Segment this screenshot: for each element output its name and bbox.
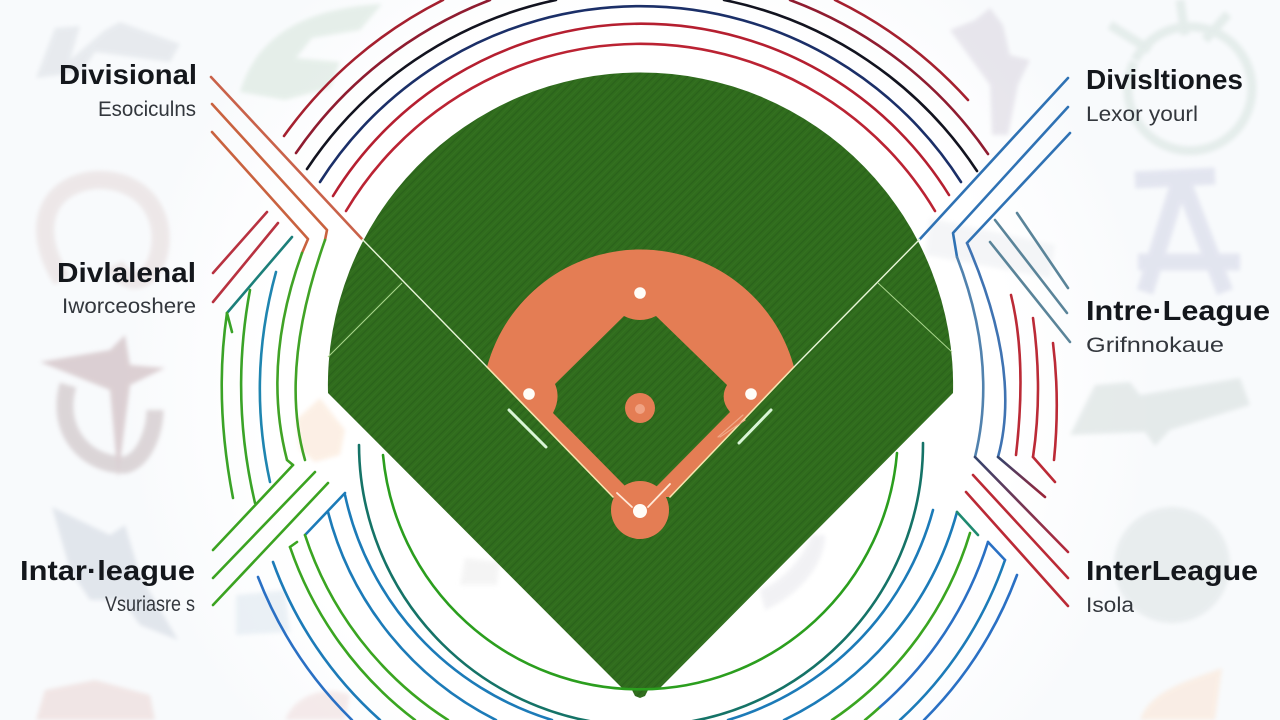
label: top right: Lexor yourl <box>1086 103 1198 126</box>
inner green arc crossing the field tip <box>383 453 897 689</box>
connector lines: lower left <box>213 465 328 605</box>
label: top right <box>1086 64 1243 126</box>
inner grass diamond <box>553 316 730 487</box>
label: top left: Esociculns <box>98 98 196 121</box>
label: middle right: Grifnnokaue <box>1086 334 1224 357</box>
arcs: lower green and blue band <box>258 443 1017 720</box>
outfield foul and fence lines <box>328 239 952 367</box>
infield dirt <box>487 249 794 497</box>
connector lines: upper right <box>920 78 1070 342</box>
label: middle left <box>57 257 196 318</box>
label: bottom right <box>1086 555 1258 617</box>
label: bottom right: Isola <box>1086 594 1134 617</box>
label: top left: Divisional <box>59 59 197 90</box>
connector lines: lower right <box>966 457 1068 606</box>
label: bottom left: Intar·league <box>20 555 195 586</box>
label: bottom left <box>20 555 195 616</box>
arcs: upper red and navy band <box>284 0 988 211</box>
pitcher's mound <box>625 393 655 423</box>
label: middle right <box>1086 295 1270 357</box>
connector lines: upper left <box>211 77 362 313</box>
baseball field <box>328 72 953 698</box>
label: bottom right: InterLeague <box>1086 555 1258 586</box>
outfield grass <box>328 72 953 698</box>
infield foul lines <box>487 367 794 507</box>
label: middle right: Intre·League <box>1086 295 1270 326</box>
label: bottom left: Vsuriasre s <box>105 593 195 616</box>
home plate circle <box>611 481 669 539</box>
label: top right: Divisltiones <box>1086 64 1243 95</box>
label: middle left: Iworceoshere <box>62 295 196 318</box>
arcs: left green and blue band <box>222 240 325 503</box>
bases <box>523 287 757 518</box>
label: top left <box>59 59 197 121</box>
label: middle left: Divlalenal <box>57 257 196 288</box>
arcs: right blue and red band <box>957 243 1057 460</box>
